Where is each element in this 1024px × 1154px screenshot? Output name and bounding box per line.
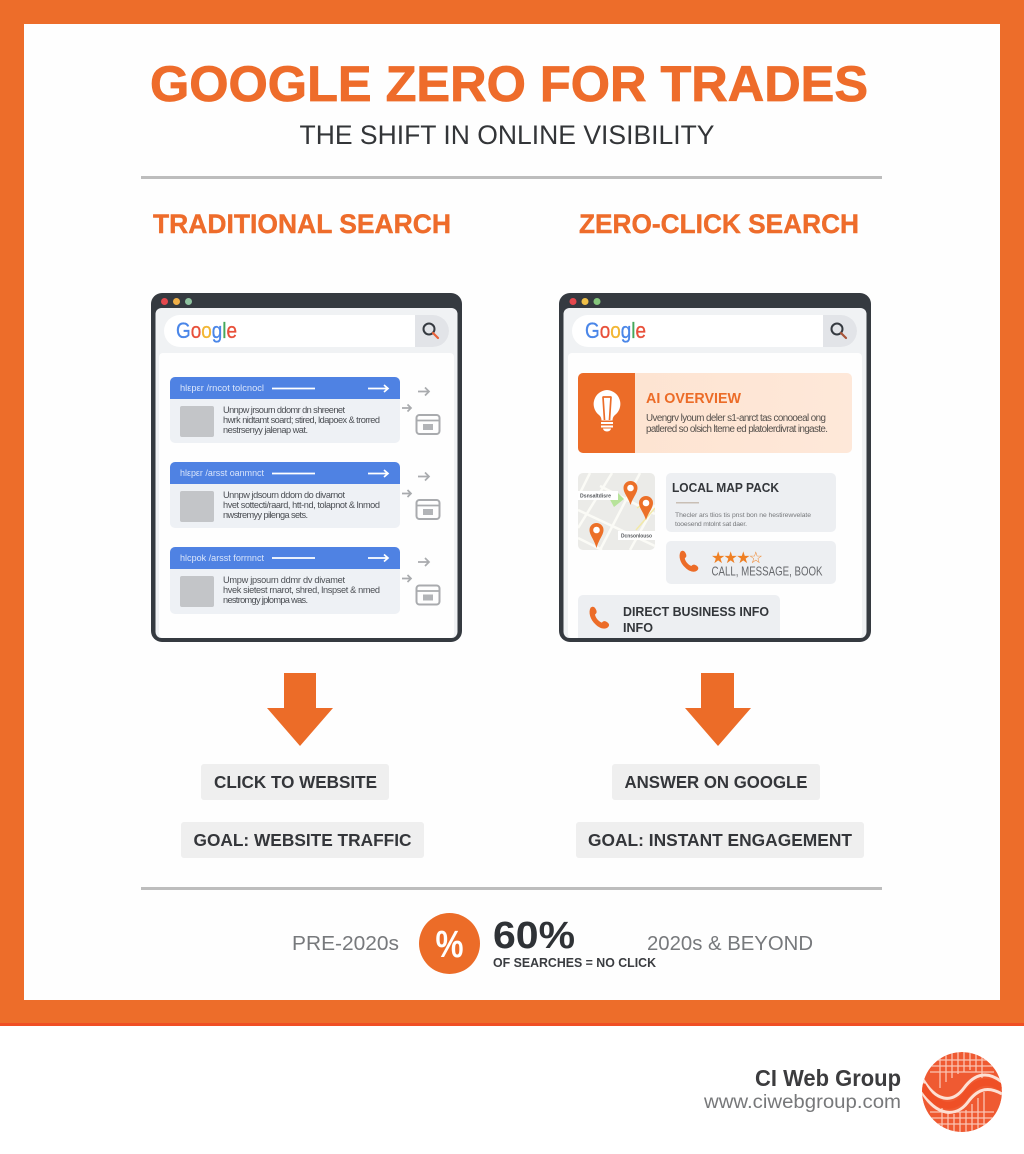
result card 1: hlεpεr /rncot tolcnocl: [180, 383, 264, 393]
direct business info card: INFO: [623, 620, 653, 635]
statistic: 60 percent: OF SEARCHES = NO CLICK: [493, 955, 657, 970]
local map pack card: [666, 473, 836, 532]
icon: percent circle: %: [436, 924, 464, 966]
panel: traditional browser mockup: [151, 293, 462, 642]
icon: phone: [590, 607, 609, 629]
result card 2: nwstremyy pilenga sets.: [223, 510, 308, 520]
result card 2: hlεpεr /arsst oanmnct: [180, 468, 265, 478]
search bar: [572, 315, 857, 347]
result card 1: hwrk nidtamt soard; stired, ldapoex & trorred: [223, 415, 380, 425]
label: click to website: [201, 764, 389, 800]
local map pack card: tooesend mtolnt sat daer.: [675, 521, 747, 528]
footer brand text: CI Web Group: [755, 1065, 901, 1091]
icon: map pins: [590, 481, 653, 548]
result card 3: nestromgy jplompa was.: [223, 595, 308, 605]
icon: light bulb: [594, 390, 620, 432]
AI overview card: Uvengrv lyoum deler s1-anrct tas conooeal ong: [646, 413, 826, 424]
statistic: 60 percent: 60%: [493, 915, 575, 957]
arrow: traditional down: [267, 673, 333, 746]
label: goal website traffic: [181, 822, 424, 858]
heading: zero-click search: ZERO-CLICK SEARCH: [579, 209, 859, 239]
direct business info card: [578, 595, 780, 638]
label: goal instant engagement: [576, 822, 864, 858]
heading: traditional search: TRADITIONAL SEARCH: [153, 209, 451, 239]
result card 1: nestrsenyy jalenap wat.: [223, 425, 308, 435]
arrows and page icon 2: [402, 472, 440, 519]
map thumbnail: [578, 473, 655, 550]
result card 2: hvet sottecti/raard, htt-nd, tolapnot & lnmod: [223, 500, 380, 510]
call, message, book card: CALL, MESSAGE, BOOK: [712, 564, 823, 578]
result card 1: [170, 377, 400, 443]
local map pack card: Thecler ars tlios tis pnst bon ne hestirewvelate: [675, 512, 811, 519]
direct business info card: DIRECT BUSINESS INFO: [623, 604, 769, 619]
timeline label: 2020s and beyond: 2020s & BEYOND: [647, 933, 813, 955]
icon: logo: [922, 1052, 1002, 1132]
icon: window dots: [161, 298, 192, 305]
icon: percent circle: [419, 913, 480, 974]
result card 1: Unnpw jrsourn ddomr dn shreenet: [223, 405, 345, 415]
arrows and page icon 3: [402, 558, 440, 604]
label: answer on google: ANSWER ON GOOGLE: [624, 772, 808, 792]
subtitle: THE SHIFT IN ONLINE VISIBILITY: [300, 120, 714, 150]
call, message, book card: [666, 541, 836, 584]
statistic: 60 percent: [493, 915, 657, 970]
map thumbnail: Dcnsonlouso: [621, 534, 653, 540]
arrows and page icon 1: [402, 388, 440, 434]
arrow: zero-click down: [685, 673, 751, 746]
AI overview card: patlered so olsich lterne ed platolerdivrat ingaste.: [646, 424, 828, 435]
footer brand text: www.ciwebgroup.com: [703, 1092, 901, 1113]
AI overview card: AI OVERVIEW: [646, 391, 741, 407]
search bar: [164, 315, 449, 347]
result card 2: [170, 462, 400, 528]
star rating: ★★★☆: [711, 550, 763, 567]
label: answer on google: [612, 764, 820, 800]
footer brand text: [703, 1065, 901, 1113]
label: goal website traffic: GOAL: WEBSITE TRAFFIC: [194, 830, 412, 850]
result card 2: Unnpw jdsourn ddom do divarnot: [223, 490, 345, 500]
result card 3: hvek sietest rnarot, shred, lnspset & nmed: [223, 585, 380, 595]
result card 3: Umpw jpsourn ddmr dv divamet: [223, 575, 345, 585]
icon: phone: [680, 551, 698, 572]
panel: zero-click browser mockup: [141, 293, 1002, 1132]
search bar: Google: [585, 318, 646, 343]
map thumbnail: Dsnsaltdisre: [580, 494, 611, 500]
local map pack card: LOCAL MAP PACK: [672, 481, 779, 495]
search bar: Google: [176, 318, 237, 343]
result card 3: [170, 547, 400, 614]
label: click to website: CLICK TO WEBSITE: [214, 772, 377, 792]
label: goal instant engagement: GOAL: INSTANT ENGAGEMENT: [588, 830, 852, 850]
timeline label: pre-2020s: PRE-2020s: [292, 933, 399, 955]
title: GOOGLE ZERO FOR TRADES: [150, 56, 868, 112]
result card 3: hlcpok /arsst forrnnct: [180, 553, 265, 563]
AI overview card: [578, 373, 852, 453]
icon: window dots: [570, 298, 600, 305]
